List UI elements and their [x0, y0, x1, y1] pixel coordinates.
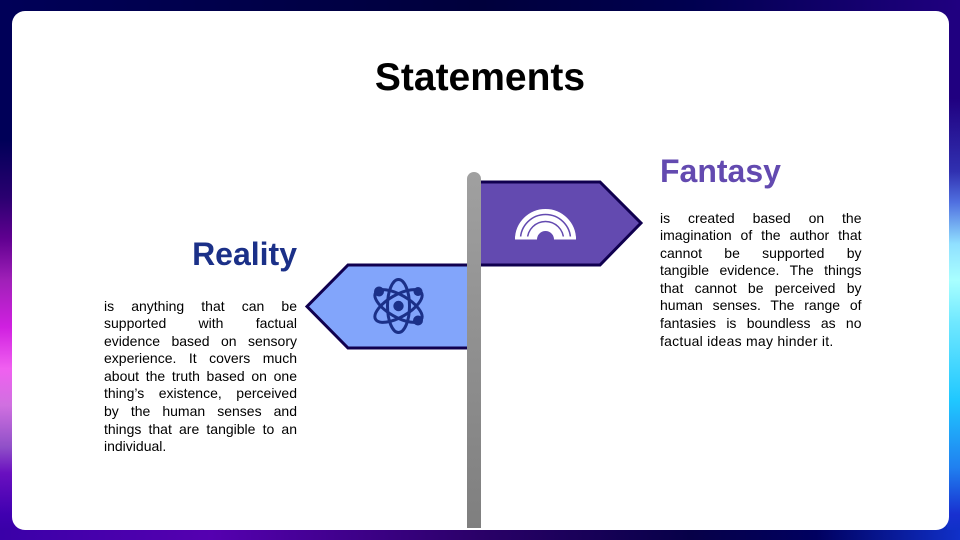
- text: reality description: [104, 298, 297, 454]
- heading: Fantasy: Fantasy: [660, 153, 781, 189]
- text: fantasy description: tangible evidence. The things: [660, 262, 862, 278]
- text: fantasy description: factual ideas may hinder it.: [660, 333, 834, 349]
- text: reality description: by the human senses and: [104, 403, 297, 419]
- text: reality description: supported with factual: [104, 315, 297, 331]
- heading: Reality: Reality: [192, 236, 297, 272]
- title: Statements: [375, 56, 585, 98]
- sign: reality arrow: [307, 265, 470, 348]
- text: reality description: evidence based on sensory: [104, 333, 297, 349]
- text: reality description: experience. It covers much: [104, 350, 297, 366]
- icon: atom: [370, 280, 427, 332]
- icon: rainbow: [515, 211, 576, 240]
- text: fantasy description: fantasies is boundless as no: [660, 315, 862, 331]
- post: [467, 172, 481, 528]
- text: fantasy description: [660, 210, 862, 349]
- text: reality description: about the truth based on one: [104, 368, 297, 384]
- text: reality description: individual.: [104, 438, 166, 454]
- text: reality description: is anything that can be: [104, 298, 297, 314]
- text: fantasy description: that cannot be perceived by: [660, 280, 862, 296]
- text: fantasy description: cannot be supported by: [660, 245, 862, 261]
- text: fantasy description: is created based on the: [660, 210, 862, 226]
- text: fantasy description: human senses. The range of: [660, 297, 862, 313]
- text: fantasy description: imagination of the author that: [660, 227, 862, 243]
- sign: fantasy arrow: [470, 182, 641, 265]
- text: reality description: things that are tangible to an: [104, 421, 297, 437]
- text: reality description: thing’s existence, perceived: [104, 385, 297, 401]
